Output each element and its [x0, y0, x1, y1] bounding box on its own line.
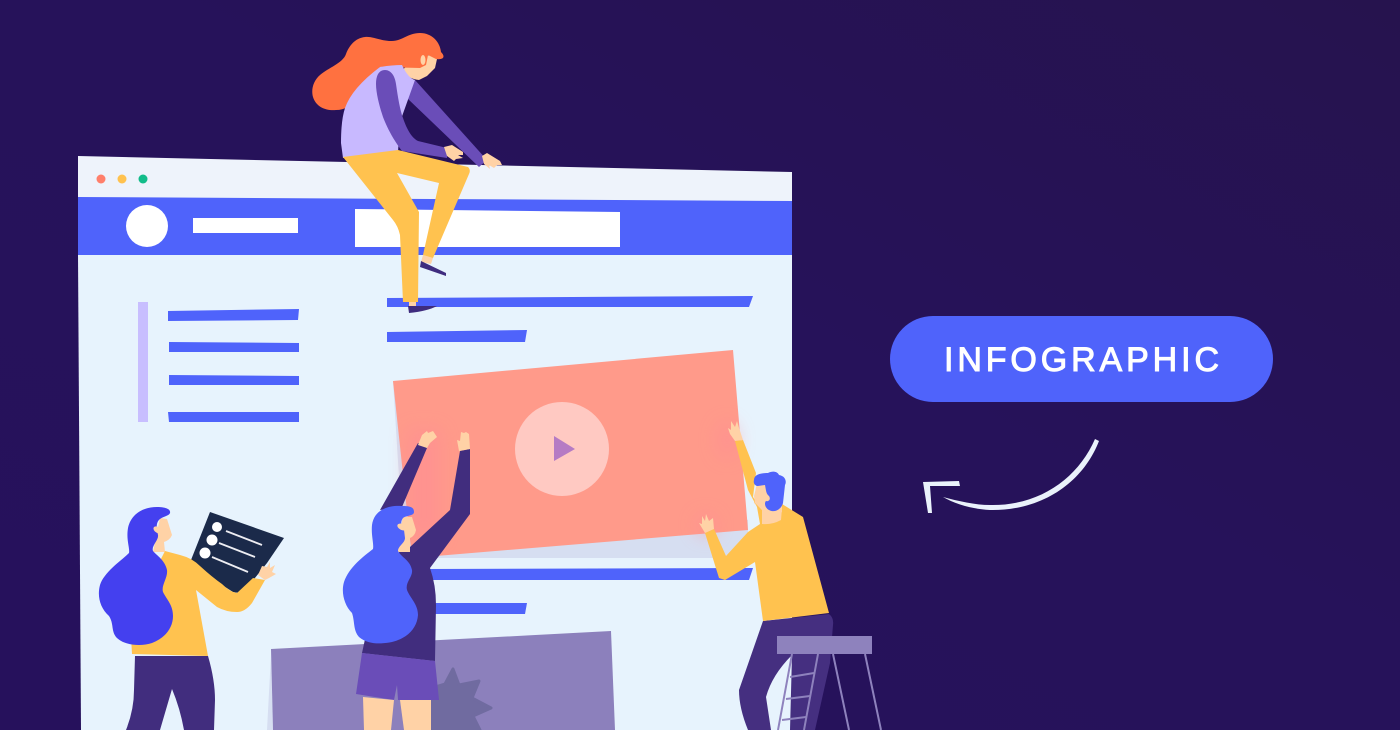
neck and face [402, 55, 437, 80]
badge: infographic pill: INFOGRAPHIC [944, 341, 1219, 379]
neck and face [754, 485, 783, 525]
hand drawn arrow [923, 439, 1099, 513]
neck overlay [762, 508, 782, 524]
ear [420, 55, 426, 65]
figure: woman holding video card [343, 431, 470, 730]
sweater [130, 551, 265, 656]
ear [152, 525, 164, 535]
panel: browser window [78, 156, 792, 730]
figure: woman with clipboard [99, 507, 284, 730]
sweater [705, 440, 829, 621]
upper hand [728, 421, 743, 441]
hair [343, 506, 418, 643]
logo circle [126, 205, 168, 247]
near hand [444, 145, 463, 161]
trousers [739, 614, 833, 730]
ear [396, 522, 408, 532]
search box [355, 209, 620, 247]
hair [312, 33, 443, 110]
face overlay [754, 484, 772, 510]
shorts [356, 653, 439, 700]
clipboard [191, 512, 284, 593]
neck and face [153, 518, 172, 552]
play button [515, 402, 609, 496]
hair [99, 507, 173, 645]
hands [418, 431, 470, 451]
torso [341, 65, 415, 158]
figure: man on ladder [699, 421, 833, 730]
lower card shadow [267, 655, 273, 730]
gear badge [425, 669, 491, 730]
video card shadow [393, 381, 748, 558]
trousers [126, 656, 215, 730]
near arm [376, 70, 447, 158]
lower card [271, 631, 615, 730]
sidebar lines [168, 309, 299, 422]
heading lines [387, 296, 753, 342]
legs [363, 697, 431, 730]
hair [754, 472, 786, 511]
browser title bar [78, 156, 792, 202]
browser body [78, 255, 792, 730]
video card glow [408, 422, 737, 540]
step ladder [777, 636, 881, 730]
trouser ankle [409, 255, 433, 308]
window dots [96, 174, 148, 184]
lower hand [699, 514, 714, 533]
ladder legs [778, 654, 881, 730]
neck and face [397, 517, 416, 552]
far hand [482, 153, 502, 169]
nav label [193, 218, 298, 233]
far arm [407, 80, 487, 167]
arms and torso [362, 443, 470, 661]
checklist [200, 522, 262, 572]
navigation bar [78, 197, 792, 255]
trousers [343, 150, 470, 302]
ladder top [777, 636, 872, 654]
lower text lines [425, 568, 753, 614]
sidebar accent [138, 302, 148, 422]
badge: infographic pill [890, 316, 1273, 402]
hand [258, 562, 276, 580]
video card [393, 350, 748, 558]
figure: woman sitting on browser [312, 33, 502, 313]
ladder rungs [782, 673, 814, 720]
shoes [408, 261, 446, 313]
